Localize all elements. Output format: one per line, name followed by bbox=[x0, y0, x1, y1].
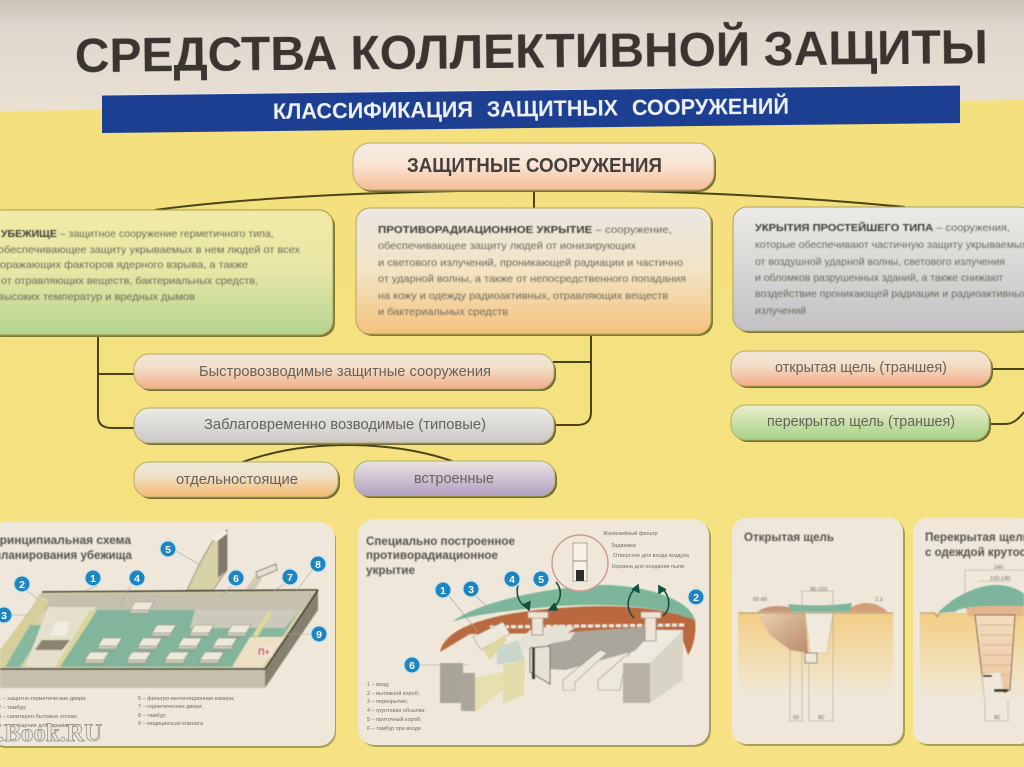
connector: root to branches bbox=[98, 190, 1024, 463]
card: открытая щель bbox=[732, 518, 905, 746]
definition text: от ударной волны, а также от непосредственного попадания bbox=[378, 273, 686, 285]
pill: быстровозводимые bbox=[134, 354, 556, 391]
callout numbers: 5 bbox=[538, 574, 544, 586]
root box: ЗАЩИТНЫЕ СООРУЖЕНИЯ bbox=[407, 155, 662, 177]
inset: filter detail: Отверстие для входа воздуха bbox=[613, 553, 690, 559]
definition text: излучений bbox=[755, 305, 806, 317]
callout numbers: 8 bbox=[315, 559, 321, 571]
legend: 3 – перекрытие; bbox=[367, 699, 408, 705]
legend: 3 – санитарно-бытовые отсеки; bbox=[0, 714, 78, 720]
trench section illustration: 90-120 bbox=[810, 587, 827, 593]
panel: убежище bbox=[0, 210, 335, 337]
callout numbers: 3 bbox=[1, 610, 7, 622]
callout numbers bbox=[0, 540, 328, 643]
card heading: Специально построенное bbox=[366, 536, 515, 548]
definition text: УКРЫТИЯ ПРОСТЕЙШЕГО ТИПА – сооружения, bbox=[755, 221, 1010, 234]
pill: встроенные: встроенные bbox=[414, 471, 494, 487]
subtitle band: КЛАССИФИКАЦИЯ ЗАЩИТНЫХ СООРУЖЕНИЙ bbox=[273, 94, 789, 124]
card heading: Открытая щель bbox=[744, 532, 834, 544]
legend: 4 – грунтовая обсыпка; bbox=[367, 708, 426, 714]
definition text: на кожу и одежду радиоактивных, отравляющих веществ bbox=[378, 290, 668, 302]
arrows: air flow bbox=[517, 582, 669, 618]
inset: filter detail: Задвижка bbox=[611, 543, 637, 549]
pill: заблаговременно возводимые bbox=[134, 408, 556, 445]
legend bbox=[0, 696, 235, 729]
definition text bbox=[755, 221, 1024, 317]
pill: отдельностоящие: отдельностоящие bbox=[176, 472, 298, 488]
card heading bbox=[0, 535, 133, 562]
pill: заблаговременно возводимые: Заблаговременно возводимые (типовые) bbox=[204, 417, 486, 433]
trench section illustration: 60 bbox=[793, 715, 799, 721]
definition text: УБЕЖИЩЕ – защитное сооружение герметичного типа, bbox=[1, 228, 274, 240]
covered trench illustration bbox=[920, 565, 1024, 722]
pill: встроенные bbox=[354, 461, 557, 498]
definition text: и обломков разрушенных зданий, а также снижают bbox=[755, 272, 1003, 284]
card heading bbox=[925, 532, 1024, 559]
definition text: ПРОТИВОРАДИАЦИОННОЕ УКРЫТИЕ – сооружение, bbox=[378, 224, 672, 236]
pill: перекрытая щель: перекрытая щель (траншея) bbox=[767, 414, 955, 430]
legend: 8 – тамбур; bbox=[138, 713, 167, 719]
legend: 2 – вытяжной короб; bbox=[367, 690, 420, 697]
card heading: противорадиационное bbox=[366, 550, 498, 562]
card: противорадиационное укрытие bbox=[358, 519, 711, 747]
card heading: укрытие bbox=[366, 565, 415, 577]
callout numbers: 5 bbox=[165, 544, 171, 556]
covered trench illustration: 120-140 bbox=[990, 576, 1010, 582]
shelter section illustration bbox=[440, 585, 695, 712]
card heading bbox=[366, 536, 515, 577]
definition text: и светового излучений, проникающей радиации и частично bbox=[378, 257, 683, 269]
pill: быстровозводимые: Быстровозводимые защитные сооружения bbox=[199, 364, 491, 380]
definition text bbox=[0, 228, 301, 303]
callout numbers: 4 bbox=[134, 573, 140, 585]
legend bbox=[367, 682, 426, 732]
callout numbers: 3 bbox=[468, 584, 474, 596]
legend: 4 – помещения для укрываемых; bbox=[0, 723, 83, 729]
callout numbers: 6 bbox=[233, 573, 239, 585]
legend: 9 – медицинская комната bbox=[138, 721, 204, 727]
definition text: от отравляющих веществ, бактериальных средств, bbox=[1, 275, 258, 287]
inset: filter detail: Жалюзийный фильтр bbox=[603, 530, 658, 537]
callout numbers: 9 bbox=[316, 629, 322, 641]
callout numbers: 4 bbox=[509, 574, 515, 586]
trench section illustration: 50-60 bbox=[753, 597, 767, 603]
callout numbers: 2 bbox=[19, 579, 25, 591]
trench section illustration: 80 bbox=[818, 715, 824, 721]
shelter plan illustration: П+ bbox=[258, 647, 270, 657]
definition text: обеспечивающее защиту укрываемых в нем людей от всех bbox=[0, 244, 301, 256]
legend: 5 – фильтро-вентиляционная камера; bbox=[138, 696, 235, 702]
panel: укрытия простейшего типа bbox=[733, 207, 1024, 333]
pill: открытая щель: открытая щель (траншея) bbox=[775, 360, 947, 376]
panel: противорадиационное укрытие bbox=[356, 208, 713, 336]
card: перекрытая щель bbox=[913, 518, 1024, 746]
callout numbers: 2 bbox=[693, 592, 699, 604]
definition text: высоких температур и вредных дымов bbox=[0, 291, 195, 303]
callout numbers: 1 bbox=[440, 585, 446, 597]
covered trench illustration: 240 bbox=[994, 565, 1003, 571]
definition text: воздействие проникающей радиации и радиоактивных bbox=[755, 288, 1024, 300]
callout numbers: 7 bbox=[287, 572, 293, 584]
trench section illustration bbox=[738, 587, 893, 722]
shelter plan illustration bbox=[0, 530, 318, 688]
definition text: которые обеспечивают частичную защиту укрываемых bbox=[755, 239, 1024, 251]
legend: 6 – тамбур при входе bbox=[367, 726, 421, 732]
card: схема убежища bbox=[0, 522, 336, 748]
subtitle band bbox=[102, 85, 960, 133]
legend: 1 – вход; bbox=[367, 682, 390, 688]
legend: 7 – герметические двери; bbox=[138, 704, 203, 710]
trench section illustration: 1:3 bbox=[875, 597, 883, 603]
legend: 5 – приточный короб; bbox=[367, 716, 422, 723]
callout numbers: 1 bbox=[90, 573, 96, 585]
inset: filter detail: Корзина для оседания пыли bbox=[612, 564, 684, 570]
callout numbers bbox=[403, 570, 705, 674]
pill: перекрытая щель bbox=[731, 405, 991, 442]
covered trench illustration: 80 bbox=[994, 715, 1000, 721]
definition text: поражающих факторов ядерного взрыва, а также bbox=[0, 259, 248, 271]
root box bbox=[353, 143, 716, 192]
inset: filter detail bbox=[552, 530, 690, 591]
definition text: обеспечивающее защиту людей от ионизирующих bbox=[378, 240, 637, 252]
legend: 1 – защитно-герметические двери; bbox=[0, 696, 87, 702]
pill: отдельностоящие bbox=[134, 462, 340, 499]
title: СРЕДСТВА КОЛЛЕКТИВНОЙ ЗАЩИТЫ bbox=[75, 19, 988, 83]
definition text: от воздушной ударной волны, светового излучения bbox=[755, 256, 1005, 268]
definition text: и бактериальных средств bbox=[378, 306, 508, 318]
watermark: .Book.RU bbox=[0, 720, 102, 747]
definition text bbox=[378, 224, 686, 318]
callout numbers: 6 bbox=[409, 660, 415, 672]
pill: открытая щель bbox=[731, 351, 993, 388]
